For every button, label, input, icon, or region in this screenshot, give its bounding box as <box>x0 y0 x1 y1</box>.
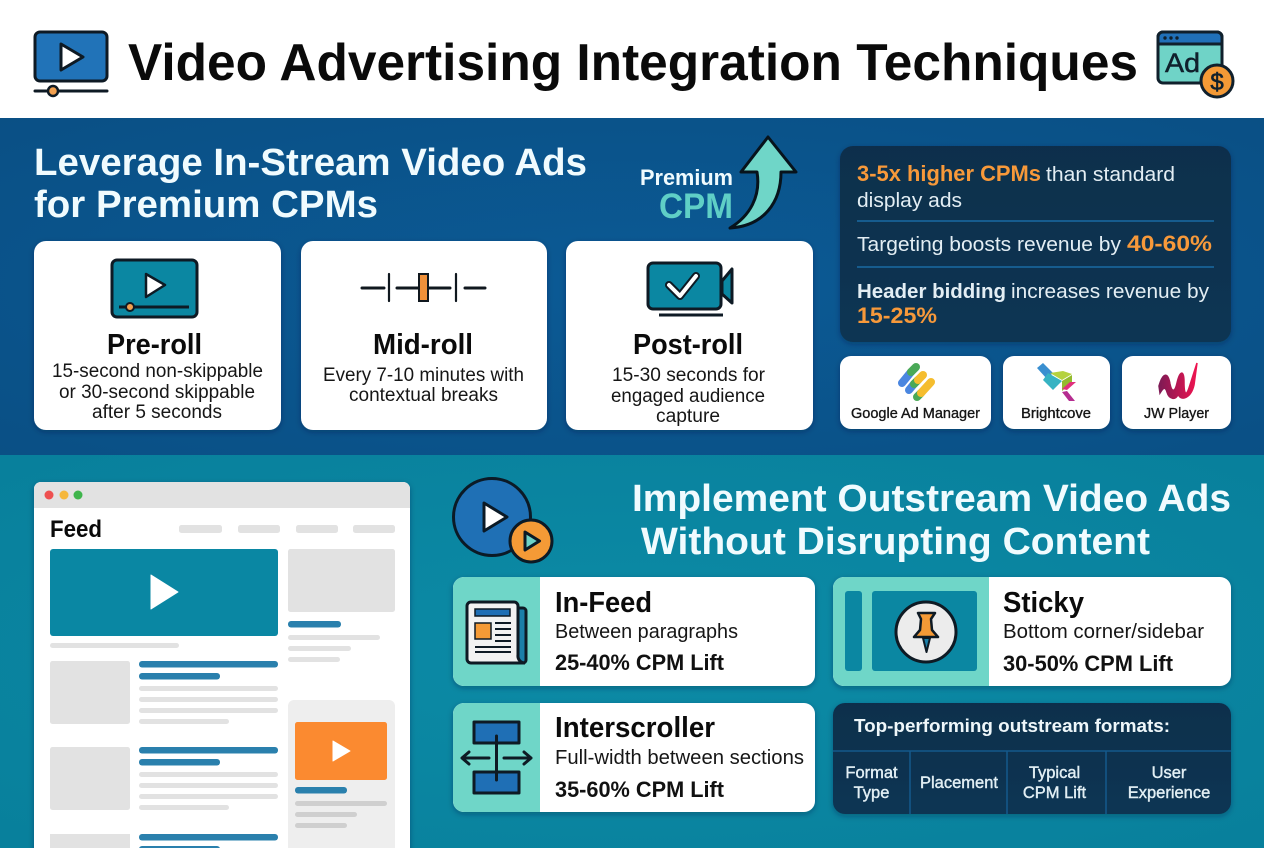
panel: in-stream statistics: Header bidding <box>857 280 1006 303</box>
panel: in-stream statistics: increases revenue by <box>1011 280 1210 303</box>
header band <box>0 0 1264 118</box>
card: sticky <box>833 577 1231 686</box>
callout: premium CPM: Premium <box>640 165 733 190</box>
card: post-roll: Post-roll <box>633 329 743 361</box>
icon: ad window with dollar coin: Ad <box>1165 48 1200 78</box>
card: in-feed: 25-40% CPM Lift <box>555 650 725 675</box>
logo card: Brightcove <box>1003 356 1110 429</box>
card: pre-roll: or 30-second skippable <box>59 382 255 403</box>
panel: in-stream statistics <box>840 146 1231 342</box>
card: interscroller: Full-width between sections <box>555 747 804 769</box>
table: top-performing outstream formats: CPM Lift <box>1023 784 1087 802</box>
logo card: JW Player: JW Player <box>1144 405 1209 422</box>
card: in-feed <box>453 577 815 686</box>
card: in-feed: Between paragraphs <box>555 621 738 643</box>
heading: outstream <box>632 478 1231 563</box>
icon: ad window with dollar coin <box>1158 32 1233 97</box>
icon: Brightcove cubes <box>1037 363 1076 401</box>
icon: push pin <box>896 602 956 662</box>
card: post-roll <box>566 241 813 430</box>
browser mockup: feed page: Feed <box>50 516 102 543</box>
callout: premium CPM <box>640 165 733 226</box>
in-feed video ad <box>50 549 278 636</box>
card: post-roll: 15-30 seconds for <box>612 365 766 386</box>
icon: post-roll camera <box>648 263 732 315</box>
card: mid-roll: Every 7-10 minutes with <box>323 365 524 386</box>
icon: newspaper <box>467 602 526 663</box>
icon: JW Player wave <box>1159 363 1197 398</box>
icon: Google Ad Manager bars <box>902 367 931 397</box>
card: pre-roll <box>34 241 281 430</box>
logo card: Google Ad Manager: Google Ad Manager <box>851 405 980 422</box>
heading: outstream: Without Disrupting Content <box>641 521 1150 563</box>
heading: in-stream <box>34 142 587 226</box>
card: post-roll: engaged audience <box>611 386 765 407</box>
card: interscroller <box>453 703 815 812</box>
card: sticky: Bottom corner/sidebar <box>1003 621 1204 643</box>
card: interscroller: 35-60% CPM Lift <box>555 777 725 802</box>
arrow: rising CPM <box>730 137 796 228</box>
panel: outstream video ads <box>0 455 1264 848</box>
table: top-performing outstream formats: Format <box>845 764 898 782</box>
table: top-performing outstream formats <box>833 703 1231 814</box>
callout: premium CPM: CPM <box>659 187 733 226</box>
icon: mid-roll timeline <box>362 274 485 301</box>
table: top-performing outstream formats: Experience <box>1128 784 1210 802</box>
card: sticky: 30-50% CPM Lift <box>1003 651 1174 676</box>
panel: in-stream statistics: Targeting boosts revenue by <box>857 233 1122 256</box>
table: top-performing outstream formats: Top-performing outstream formats: <box>854 716 1170 736</box>
icon: pre-roll player <box>112 260 197 317</box>
icon: interscroller arrows <box>462 722 531 793</box>
card: pre-roll: 15-second non-skippable <box>52 361 263 382</box>
card: mid-roll: contextual breaks <box>349 385 498 406</box>
card: pre-roll: Pre-roll <box>107 329 202 361</box>
card: in-feed: In-Feed <box>555 587 652 619</box>
card: post-roll: capture <box>656 406 720 427</box>
table: top-performing outstream formats: Placement <box>920 774 998 792</box>
icon: ad window with dollar coin: $ <box>1210 69 1224 96</box>
title: Video Advertising Integration Techniques <box>128 34 1138 92</box>
logo card: JW Player <box>1122 356 1231 429</box>
panel: in-stream statistics: 15-25% <box>857 303 937 328</box>
logo card: Brightcove: Brightcove <box>1021 405 1091 422</box>
card: interscroller: Interscroller <box>555 712 715 744</box>
browser mockup: feed page <box>34 482 410 848</box>
table: top-performing outstream formats: Typical <box>1029 764 1080 782</box>
icon: video player <box>35 32 107 96</box>
logo card: Google Ad Manager <box>840 356 991 429</box>
icon: outstream play circles <box>454 478 552 562</box>
heading: in-stream: for Premium CPMs <box>34 184 378 226</box>
panel: in-stream statistics: 3-5x higher CPMs <box>857 161 1041 186</box>
card: mid-roll: Mid-roll <box>373 329 473 361</box>
table: top-performing outstream formats: User <box>1152 764 1187 782</box>
card: pre-roll: after 5 seconds <box>92 402 222 423</box>
card: sticky: Sticky <box>1003 587 1084 619</box>
panel: in-stream statistics: display ads <box>857 189 962 212</box>
panel: in-stream video ads <box>0 118 1264 455</box>
panel: in-stream statistics: 40-60% <box>1127 231 1212 256</box>
heading: outstream: Implement Outstream Video Ads <box>632 478 1231 520</box>
sidebar video ad <box>288 700 395 848</box>
heading: in-stream: Leverage In-Stream Video Ads <box>34 142 587 184</box>
card: mid-roll <box>301 241 547 430</box>
table: top-performing outstream formats: Type <box>854 784 889 802</box>
panel: in-stream statistics: than standard <box>1046 163 1175 186</box>
